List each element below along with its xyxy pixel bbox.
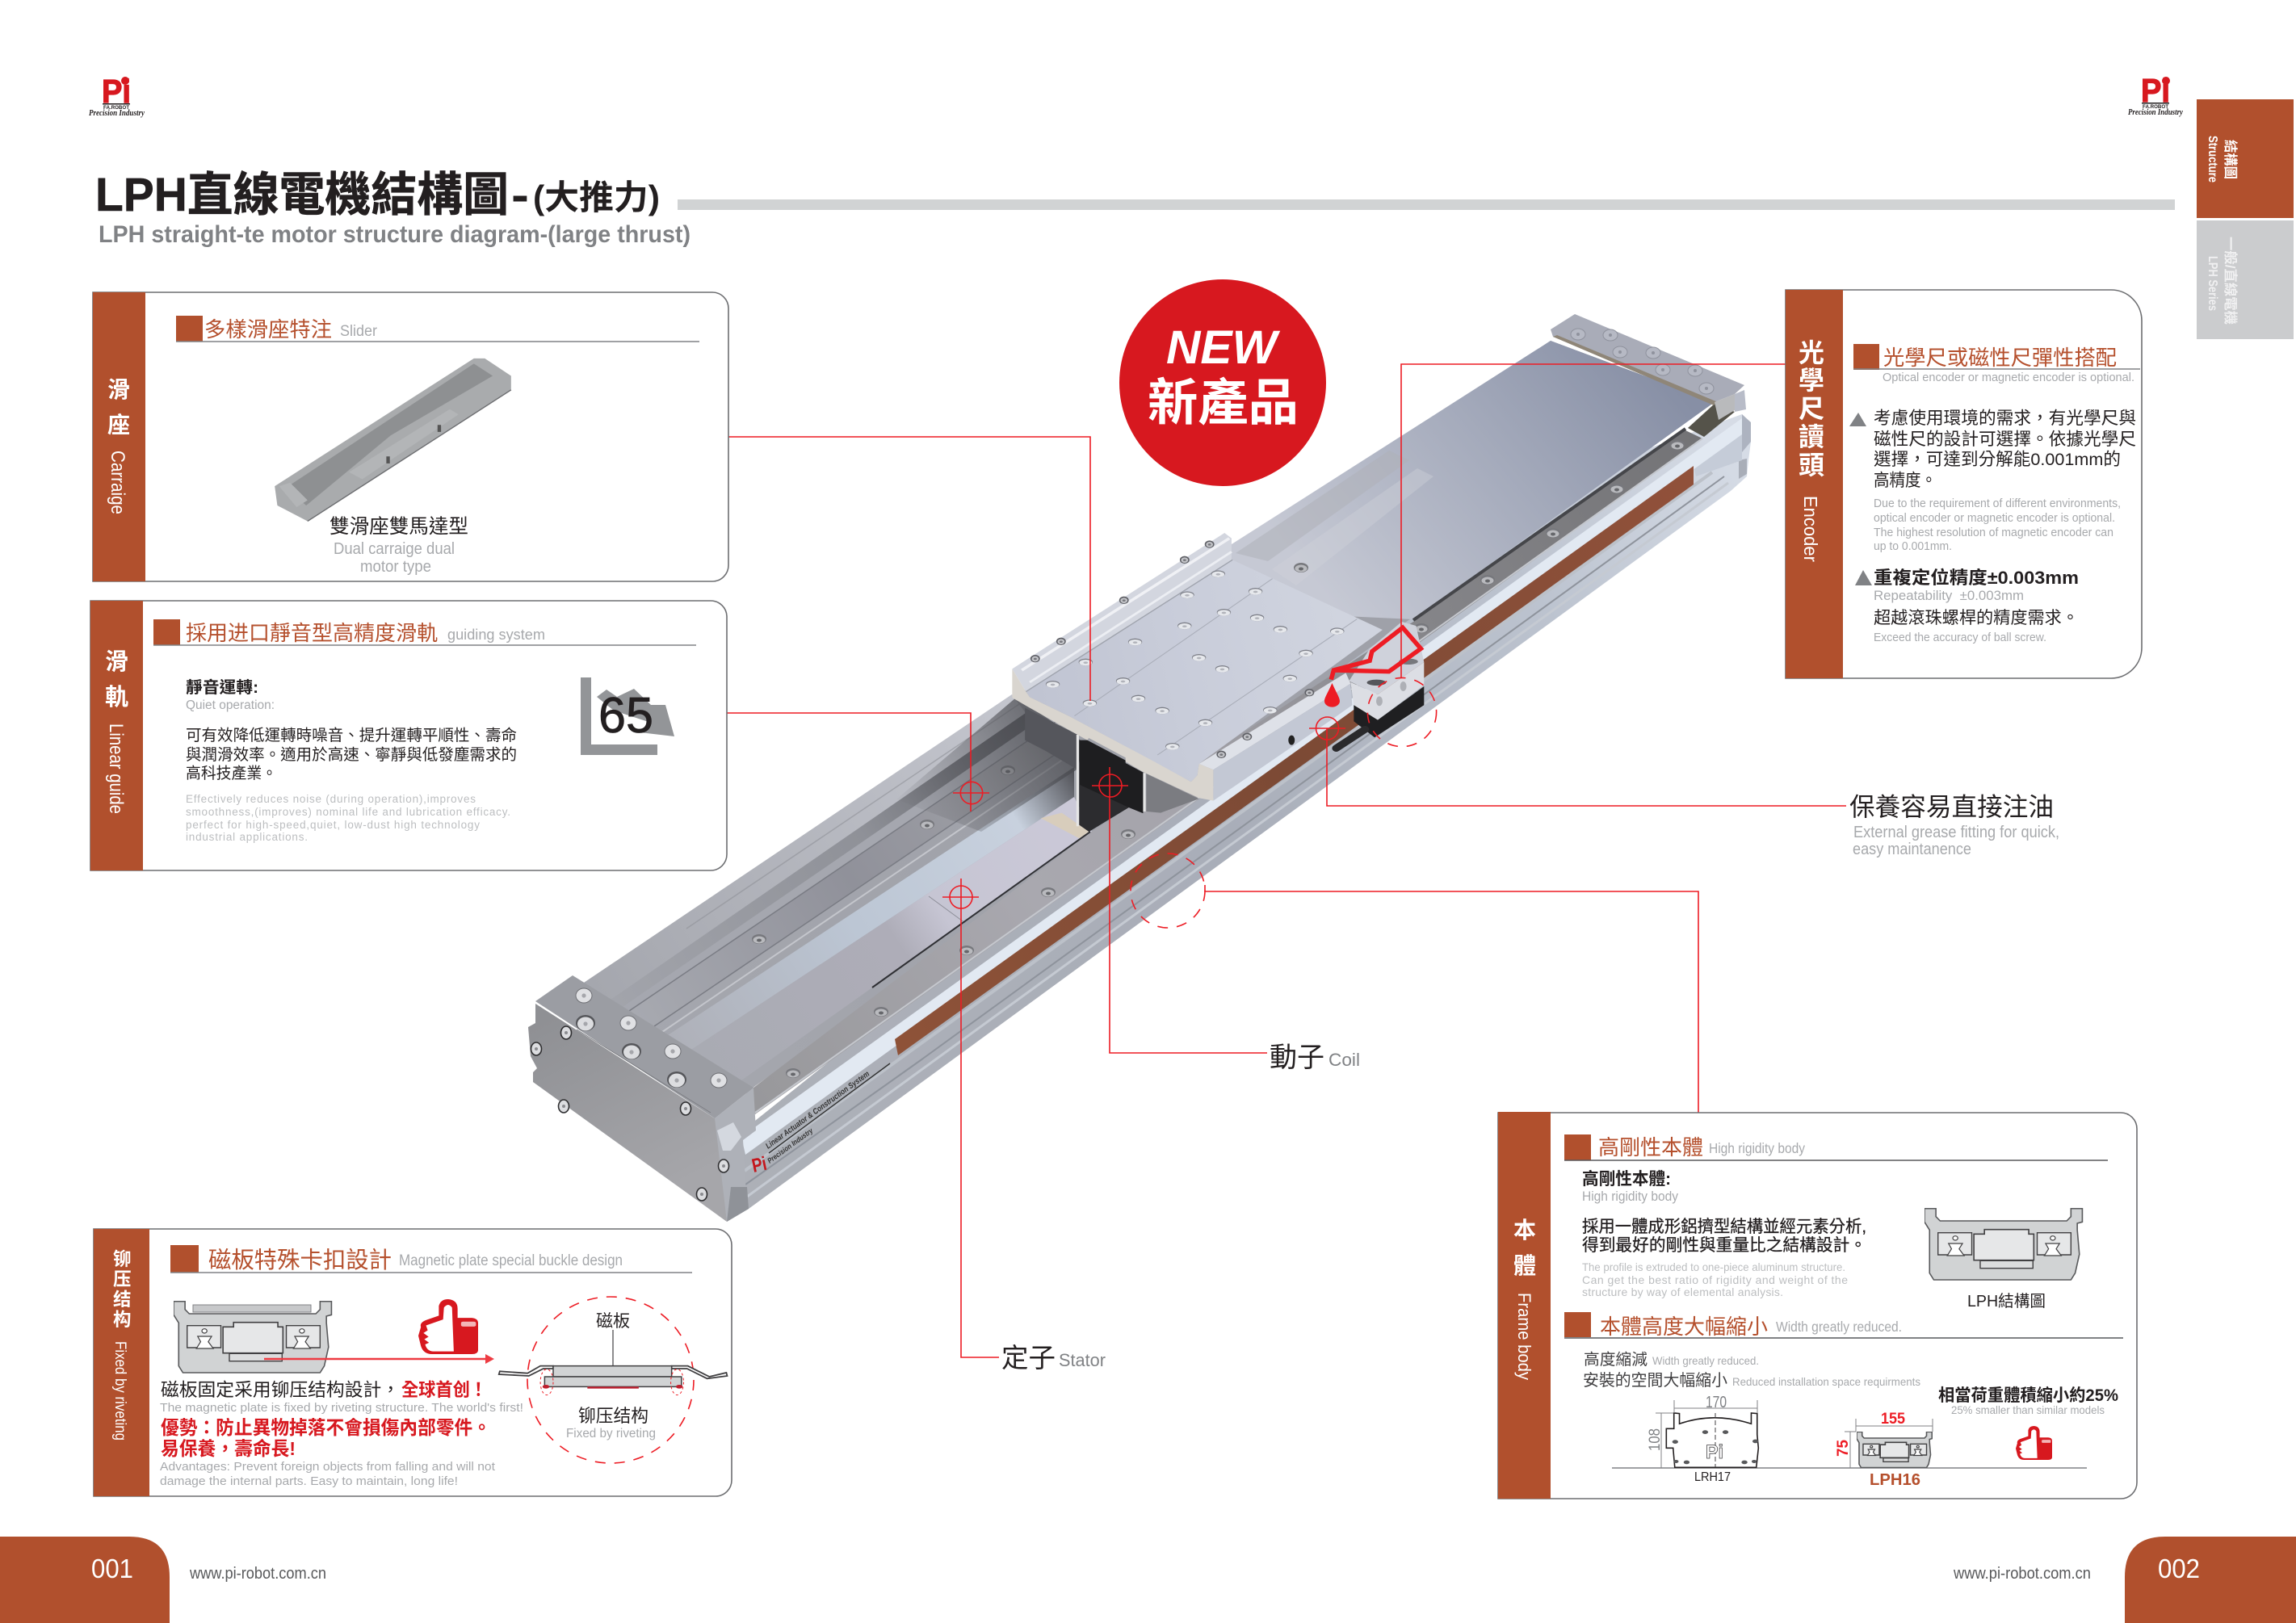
logo: right Pi Precision Industry: Pi xyxy=(2141,72,2170,109)
text: height reduction: Reduced installation space requirments xyxy=(1732,1375,1920,1388)
text: encoder options: 高精度。 xyxy=(1874,470,1937,490)
label: grease fitting xyxy=(1849,792,2059,858)
heading: magnetic plate: 磁板特殊卡扣設計 xyxy=(208,1248,392,1273)
text: riveting description: damage the internal parts. Easy to maintain, long life! xyxy=(160,1474,458,1488)
text: rigidity description: High rigidity body xyxy=(1582,1189,1679,1204)
text: riveting description: 全球首创！ xyxy=(401,1379,487,1400)
text: rigidity description: Can get the best ratio of rigidity and weight of the xyxy=(1582,1273,1848,1286)
diagram: LRH17 comparison xyxy=(1647,1394,1758,1484)
icon: thumbs up xyxy=(418,1299,478,1354)
callout line: encoder xyxy=(1367,364,1786,747)
strip: copper magnet cover xyxy=(895,466,1694,1055)
text: quiet operation xyxy=(186,677,517,843)
heading: encoder: 光學尺或磁性尺彈性搭配 xyxy=(1883,346,2117,370)
text: rigidity description: 採用一體成形鋁擠型結構並經元素分析, xyxy=(1582,1218,1866,1236)
text: height reduction xyxy=(1583,1351,2118,1416)
near left outer band xyxy=(584,694,1026,1000)
logo: left Pi Precision Industry: Pi xyxy=(102,73,131,110)
heading: encoder xyxy=(1853,344,2140,384)
heading: guiding system: guiding system xyxy=(447,626,545,643)
text: quiet operation: 靜音運轉: xyxy=(186,677,258,697)
panel: riveting: 构 xyxy=(113,1310,132,1330)
text: quiet operation: 與潤滑效率。適用於高速、寧靜與低發塵需求的 xyxy=(186,746,517,764)
heading: slider: 多樣滑座特注 xyxy=(204,317,332,342)
text: rigidity description: 得到最好的剛性與重量比之結構設計。 xyxy=(1582,1236,1866,1255)
panel: encoder: 尺 xyxy=(1799,394,1824,423)
callout line: stator xyxy=(942,879,999,1357)
panel: riveting: Fixed by riveting xyxy=(111,1341,128,1441)
carriage top plate xyxy=(1026,560,1383,782)
icon: triangle bullet xyxy=(1855,570,1872,585)
label: stator: 定子 xyxy=(1001,1343,1056,1373)
panel: encoder: 光 xyxy=(1799,338,1824,367)
text: quiet operation: smoothness,(improves) nominal life and lubrication efficacy. xyxy=(186,806,510,818)
side tab: LPH series: 一般/直線電機 xyxy=(2223,237,2239,325)
callout line: frame body xyxy=(1131,853,1698,1113)
carriage right wall xyxy=(1199,673,1352,801)
label: stator: Stator xyxy=(1059,1350,1106,1370)
icon: rail size 65 xyxy=(581,677,674,755)
icon: triangle bullet xyxy=(1849,413,1866,426)
text: height reduction: 25% smaller than similar models xyxy=(1951,1403,2105,1416)
caption: dual carriage dual motor type: 雙滑座雙馬達型 xyxy=(329,515,468,538)
brand marking on body: Linear Actuator & Construction System xyxy=(764,1070,871,1151)
heading: magnetic plate: Magnetic plate special buckle design xyxy=(399,1252,623,1269)
panel: linear guide: 軌 xyxy=(105,684,128,711)
text: encoder options: Due to the requirement of different environments, xyxy=(1874,497,2121,510)
far top plate xyxy=(1211,341,1715,619)
side face of body xyxy=(715,414,1751,1222)
logo: right Pi Precision Industry xyxy=(2128,72,2183,117)
text: quiet operation: 高科技產業。 xyxy=(186,765,277,782)
side tab: structure xyxy=(2197,99,2294,218)
text: riveting description: 磁板固定采用铆压结构設計， xyxy=(161,1379,400,1400)
text: repeatability: 重複定位精度±0.003mm xyxy=(1874,568,2079,588)
near end cap xyxy=(528,975,756,1222)
panel: linear guide: Linear guide xyxy=(105,723,127,814)
text: rigidity description: The profile is extruded to one-piece aluminum structure. xyxy=(1582,1260,1845,1273)
logo: left Pi Precision Industry: FA.ROBOT xyxy=(103,106,129,111)
diagram: LPH16 comparison: 75 xyxy=(1835,1440,1852,1457)
heading: height reduced: 本體高度大幅縮小 xyxy=(1600,1315,1768,1339)
subtitle: LPH straight-te motor structure diagram-(large thrust) xyxy=(99,221,690,248)
heading: magnetic plate xyxy=(170,1245,692,1273)
diagram: LRH17 comparison: Pi xyxy=(1706,1441,1723,1463)
label: coil xyxy=(1270,1042,1360,1073)
panel: riveting xyxy=(94,1229,732,1496)
diagram: LPH16 comparison: LPH16 xyxy=(1870,1471,1920,1489)
badge: NEW xyxy=(1119,279,1326,486)
brand marking on body xyxy=(750,1063,890,1177)
text: riveting description: 優勢：防止異物掉落不會損傷內部零件。 xyxy=(161,1417,491,1438)
footer: right page tab: 002 xyxy=(2158,1554,2200,1583)
callout line: grease xyxy=(1309,717,1846,806)
arrow: to magnified view xyxy=(264,1354,494,1364)
text: rigidity description: 高剛性本體: xyxy=(1582,1169,1671,1189)
text: repeatability: 超越滾珠螺桿的精度需求。 xyxy=(1874,608,2079,627)
text: quiet operation: industrial applications. xyxy=(186,831,308,843)
text: riveting description: Advantages: Prevent foreign objects from falling and will not xyxy=(160,1460,496,1474)
title: LPH直線電機結構圖 xyxy=(95,169,509,221)
title rule xyxy=(678,199,2175,210)
label: stator xyxy=(1001,1343,1106,1373)
panel: encoder xyxy=(1786,290,2142,678)
diagram: LPH16 comparison: 155 xyxy=(1881,1411,1905,1428)
heading: height reduced xyxy=(1564,1312,2123,1339)
diagram: LPH structure: LPH結構圖 xyxy=(1967,1292,2046,1311)
text: encoder options: up to 0.001mm. xyxy=(1874,540,1952,553)
diagram: LPH16 comparison xyxy=(1835,1411,1933,1489)
panel: frame body: 本 xyxy=(1513,1218,1536,1243)
logo: left Pi Precision Industry xyxy=(89,73,145,118)
panel: frame body: Frame body xyxy=(1514,1293,1534,1380)
carriage front profile xyxy=(1012,669,1213,801)
footer: right page tab xyxy=(2125,1537,2296,1623)
side tab: LPH series xyxy=(2197,220,2294,339)
text: height reduction: 相當荷重體積縮小約25% xyxy=(1938,1386,2118,1405)
text: quiet operation: Quiet operation: xyxy=(186,698,275,712)
strip: white band xyxy=(741,418,1742,1155)
far groove bands xyxy=(1236,451,1433,585)
panel: linear guide xyxy=(90,601,727,870)
footer: left url: www.pi-robot.com.cn xyxy=(189,1565,326,1583)
carriage interior xyxy=(1025,708,1199,838)
panel: carriage: Carraige xyxy=(107,451,128,514)
diagram: LRH17 comparison: LRH17 xyxy=(1694,1470,1731,1484)
icon: rail size 65: 65 xyxy=(598,688,653,744)
diagram: magnified riveting detail: 铆压结构 xyxy=(578,1406,649,1426)
top surface base xyxy=(584,341,1715,1118)
panel: encoder: Encoder xyxy=(1800,496,1821,562)
text: encoder options: The highest resolution of magnetic encoder can xyxy=(1874,526,2113,539)
logo: right Pi Precision Industry: FA.ROBOT xyxy=(2143,105,2168,110)
text: rigidity description: structure by way of elemental analysis. xyxy=(1582,1285,1783,1298)
diagram: magnified riveting detail xyxy=(499,1297,727,1463)
heading: high rigidity body: 高剛性本體 xyxy=(1598,1135,1703,1160)
brand marking on body: Pi xyxy=(750,1153,769,1177)
icon: thumbs up xyxy=(2016,1426,2052,1460)
channel xyxy=(611,713,1030,1007)
diagram: LRH17 comparison: 170 xyxy=(1706,1394,1727,1411)
callout line: carriage xyxy=(728,437,1090,701)
dark shading near carriage xyxy=(896,698,1082,832)
carriage with encoder xyxy=(1012,533,1424,838)
caption: dual carriage dual motor type: Dual carraige dual xyxy=(334,540,455,558)
arrow: grease fitting xyxy=(1324,627,1421,707)
panel: linear guide: 滑 xyxy=(105,648,128,675)
text: encoder options: 考慮使用環境的需求，有光學尺與 xyxy=(1874,408,2136,428)
footer: left page tab xyxy=(0,1537,170,1623)
footer: right url: www.pi-robot.com.cn xyxy=(1953,1565,2091,1583)
panel: frame body: 體 xyxy=(1513,1253,1536,1278)
title: - xyxy=(511,169,529,221)
side tab: structure: Structure xyxy=(2206,136,2219,182)
carriage left flange xyxy=(1012,533,1232,692)
text: quiet operation: 可有效降低運轉時噪音、提升運轉平順性、壽命 xyxy=(186,727,517,744)
panel: carriage xyxy=(93,292,728,581)
heading: guiding system: 採用进口靜音型高精度滑軌 xyxy=(186,621,438,645)
heading: slider xyxy=(176,316,699,342)
carriage bolts xyxy=(1030,540,1344,758)
right rail xyxy=(741,429,1702,1114)
heading: high rigidity body xyxy=(1564,1134,2108,1160)
heading: encoder: Optical encoder or magnetic encoder is optional. xyxy=(1883,371,2134,384)
label: coil: Coil xyxy=(1328,1050,1360,1070)
panel: riveting: 铆 xyxy=(113,1249,132,1269)
badge: NEW: NEW xyxy=(1166,321,1280,374)
text: encoder options xyxy=(1874,408,2136,553)
diagram: LRH17 comparison: 108 xyxy=(1647,1428,1664,1451)
text: height reduction: 安裝的空間大幅縮小 xyxy=(1583,1371,1727,1390)
panel: encoder: 讀 xyxy=(1799,422,1824,451)
panel: carriage: 座 xyxy=(107,413,130,438)
caption: dual carriage dual motor type xyxy=(329,515,468,576)
shiny rail xyxy=(668,767,1074,1050)
logo: left Pi Precision Industry: Precision Industry xyxy=(89,109,145,118)
heading: high rigidity body: High rigidity body xyxy=(1709,1140,1805,1156)
diagram: magnified riveting detail: Fixed by riveting xyxy=(566,1427,656,1441)
text: height reduction: 高度縮減 xyxy=(1584,1351,1647,1369)
label: grease fitting: 保養容易直接注油 xyxy=(1849,792,2054,821)
panel: encoder: 頭 xyxy=(1799,451,1824,480)
caption: dual carriage dual motor type: motor type xyxy=(360,558,431,576)
diagram: body cross section xyxy=(174,1302,331,1373)
text: encoder options: 選擇，可達到分解能0.001mm的 xyxy=(1874,449,2121,469)
text: encoder options: 磁性尺的設計可選擇。依據光學尺 xyxy=(1874,429,2136,449)
left rail xyxy=(623,704,1066,1032)
callout line: coil xyxy=(1092,767,1267,1053)
panel: frame body xyxy=(1498,1112,2137,1499)
product: linear motor stage xyxy=(528,314,1751,1222)
image: dual carriage stage xyxy=(275,359,511,521)
text: quiet operation: perfect for high-speed,quiet, low-dust high technology xyxy=(186,819,480,831)
far end cap xyxy=(1551,314,1746,437)
label: grease fitting: External grease fitting for quick, xyxy=(1853,824,2059,841)
side tab: LPH series: LPH Series xyxy=(2206,256,2219,311)
text: repeatability: Repeatability ±0.003mm xyxy=(1874,588,2024,603)
side tab: structure: 結構圖 xyxy=(2223,140,2239,179)
callout line: linear guide xyxy=(727,713,989,812)
text: riveting description xyxy=(160,1379,523,1488)
heading: guiding system xyxy=(153,619,696,645)
text: riveting description: The magnetic plate is fixed by riveting structure. The world's first! xyxy=(160,1401,523,1415)
panel: riveting: 结 xyxy=(113,1290,132,1310)
heading: slider: Slider xyxy=(340,323,378,340)
text: riveting description: 易保養，壽命長! xyxy=(161,1437,296,1459)
label: coil: 動子 xyxy=(1270,1042,1324,1073)
brand marking on body: Precision Industry xyxy=(766,1126,815,1165)
center stator plate xyxy=(691,797,1092,1080)
encoder read head xyxy=(1337,622,1424,749)
text: repeatability: Exceed the accuracy of ball screw. xyxy=(1874,631,2046,644)
text: repeatability xyxy=(1874,568,2079,644)
diagram: magnified riveting detail: 磁板 xyxy=(596,1312,630,1331)
label: grease fitting: easy maintanence xyxy=(1853,841,1971,858)
text: quiet operation: Effectively reduces noise (during operation),improves xyxy=(186,793,476,805)
panel: carriage: 滑 xyxy=(107,377,130,402)
text: encoder options: optical encoder or magnetic encoder is optional. xyxy=(1874,512,2115,525)
logo: right Pi Precision Industry: Precision Industry xyxy=(2128,108,2183,117)
title: (大推力) xyxy=(533,178,660,216)
panel: riveting: 压 xyxy=(113,1269,132,1290)
heading: height reduced: Width greatly reduced. xyxy=(1776,1319,1902,1335)
panel: encoder: 學 xyxy=(1799,366,1824,395)
diagram: LPH structure xyxy=(1925,1209,2082,1311)
badge: NEW: 新產品 xyxy=(1148,375,1299,431)
footer: left page tab: 001 xyxy=(91,1554,133,1583)
ground line xyxy=(1612,1467,2087,1469)
text: rigidity description xyxy=(1582,1169,1866,1298)
carriage seams xyxy=(1074,579,1357,755)
text: height reduction: Width greatly reduced. xyxy=(1652,1354,1759,1367)
